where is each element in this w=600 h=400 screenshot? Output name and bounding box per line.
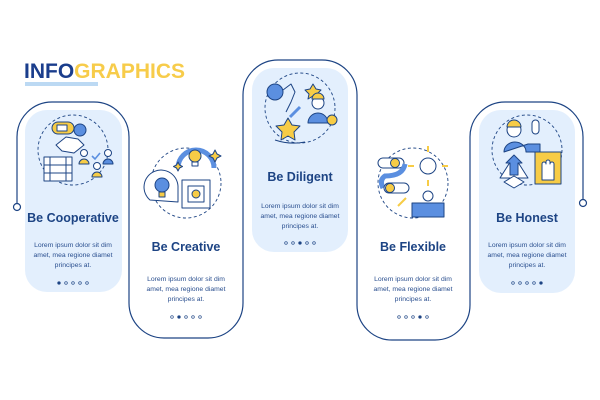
heading: Be Cooperative [27,211,119,225]
dots [285,242,315,244]
panel: be flexible: amet, mea regione diamet [374,286,453,293]
heading: Be Diligent [267,170,333,184]
text block: Lorem ipsum dolor sit dim [261,203,339,210]
heading: Be Flexible [380,240,446,254]
panel: be cooperative [25,110,122,292]
panel: be diligent: amet, mea regione diamet [261,213,340,220]
dots [171,316,201,318]
dots [398,316,428,318]
panel: be honest [479,110,575,293]
snake outline connector [14,60,586,340]
icon: honesty [492,115,562,188]
panel: be creative [144,148,226,318]
dots [512,282,542,284]
icon: cooperation [38,115,113,185]
dots [58,282,88,284]
text block: Lorem ipsum dolor sit dim [488,242,566,249]
panel: be creative: amet, mea regione diamet [147,286,226,293]
heading: Be Honest [496,211,559,225]
panel: be diligent: principes at. [282,223,318,230]
panel: be honest: principes at. [509,262,545,269]
panel: be creative: principes at. [168,296,204,303]
icon: diligence [265,73,337,143]
text block: Lorem ipsum dolor sit dim [34,242,112,249]
panel: be flexible: principes at. [395,296,431,303]
icon: flexibility [378,146,448,218]
panel: be diligent [252,68,348,252]
title: INFOGRAPHICS [24,60,185,83]
icon: creativity [144,148,221,218]
panel: be honest: amet, mea regione diamet [488,252,567,259]
heading: Be Creative [152,240,220,254]
text block: Lorem ipsum dolor sit dim [147,276,225,283]
panel: be cooperative: principes at. [55,262,91,269]
panel: be cooperative: amet, mea regione diamet [34,252,113,259]
panel: be flexible [374,146,453,318]
text block: Lorem ipsum dolor sit dim [374,276,452,283]
